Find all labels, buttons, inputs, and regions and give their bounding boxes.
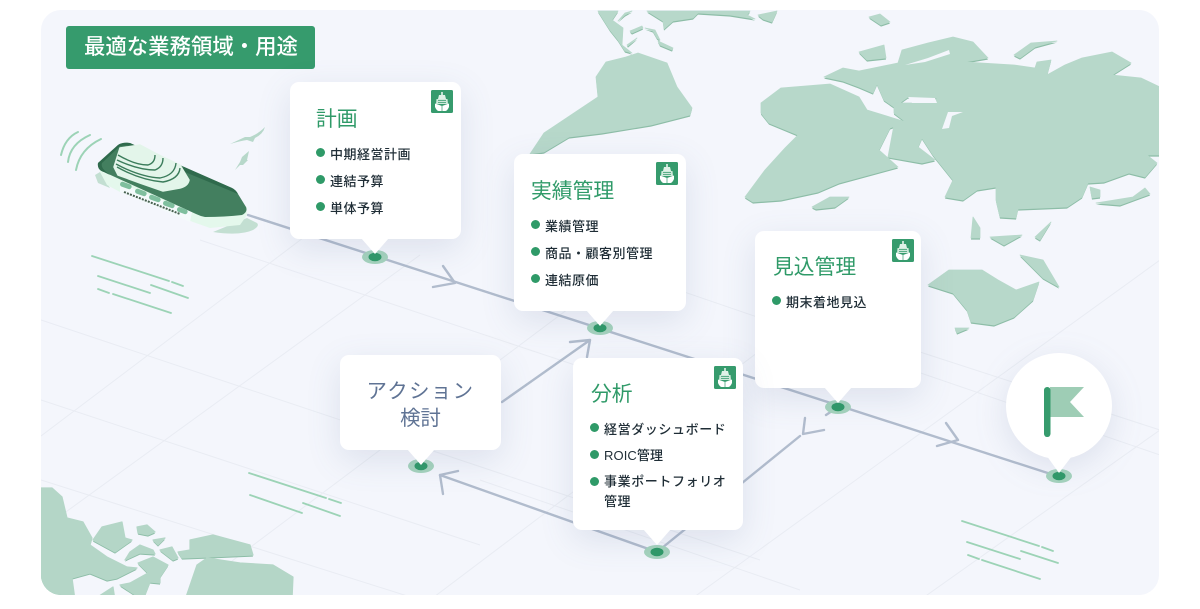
list: 連結予算 (330, 174, 384, 189)
panel: 実績管理 (514, 154, 686, 311)
list: 商品・顧客別管理 (545, 246, 653, 261)
panel: 分析 (573, 358, 743, 530)
list: 事業ポートフォリオ (604, 474, 726, 489)
list: 管理 (604, 494, 631, 509)
label (367, 381, 474, 430)
list: 単体予算 (330, 201, 384, 216)
world map: lower left land (41, 488, 293, 602)
arrow head 3 (803, 418, 824, 434)
list (531, 219, 653, 288)
return route lower (440, 407, 838, 552)
superstructure (114, 145, 189, 191)
heading: 分析 (591, 383, 633, 406)
label: 検討 (400, 408, 441, 430)
route arrows (248, 215, 1057, 552)
ship (61, 132, 258, 234)
heading: 実績管理 (531, 180, 614, 203)
panel: 見込管理 (755, 231, 921, 388)
signal waves (61, 132, 101, 170)
heading: 見込管理 (773, 256, 856, 279)
icon: ship (892, 239, 914, 262)
world map: Americas (530, 11, 890, 156)
icon: ship (714, 366, 736, 389)
icon: ship (431, 90, 453, 113)
title badge (66, 26, 315, 69)
seabirds (230, 127, 265, 170)
arrow head 4 (440, 471, 458, 494)
list: 業績管理 (545, 219, 599, 234)
list: 期末着地見込 (786, 295, 867, 310)
panel: アクション検討 (340, 355, 501, 450)
goal flag marker (1006, 353, 1112, 473)
list (590, 422, 726, 509)
pins (362, 250, 1072, 559)
world map: Afro-Eurasia and Oceania (745, 37, 1160, 335)
icon: ship (656, 162, 678, 185)
panel: 計画 (290, 82, 461, 239)
deck (98, 143, 246, 217)
arrow head 2 (937, 423, 958, 446)
windows (119, 181, 188, 215)
label: アクション (367, 381, 474, 403)
grid (41, 239, 1159, 595)
action to plan route (502, 340, 590, 402)
speed lines: lower right (962, 521, 1058, 579)
list: 中期経営計画 (330, 147, 411, 162)
speed lines: left (92, 256, 188, 313)
heading: 計画 (316, 108, 358, 131)
list: ROIC管理 (604, 448, 663, 463)
main route (248, 215, 1057, 476)
list: 経営ダッシュボード (604, 422, 726, 437)
title badge: 最適な業務領域・用途 (84, 35, 298, 59)
list: 連結原価 (545, 273, 599, 288)
list (316, 147, 411, 216)
speed lines: lower centre (249, 473, 341, 516)
arrow head 1 (433, 266, 455, 287)
hull (98, 163, 247, 228)
